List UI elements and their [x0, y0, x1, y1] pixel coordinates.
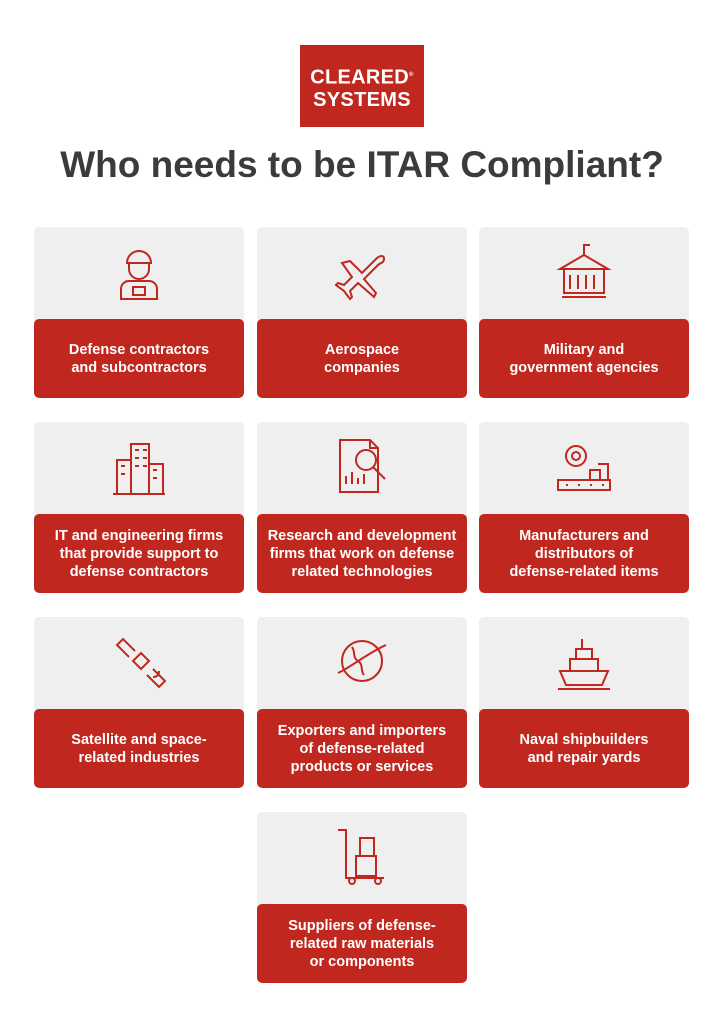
label	[479, 514, 689, 593]
label	[257, 709, 467, 788]
label	[257, 514, 467, 593]
logo: SYSTEMS	[313, 89, 411, 111]
label	[257, 904, 467, 983]
panel: naval	[479, 617, 689, 788]
label	[34, 514, 244, 593]
logo	[300, 45, 424, 127]
icon: buildings	[113, 443, 165, 495]
label	[257, 319, 467, 398]
label: and repair yards	[528, 750, 640, 766]
panel: military	[479, 227, 689, 398]
label: or components	[310, 954, 414, 970]
panel: R&D	[257, 422, 467, 593]
icon: government building	[556, 244, 612, 298]
label: related industries	[79, 750, 199, 766]
label: related technologies	[291, 564, 432, 580]
label: firms that work on defense	[270, 546, 454, 562]
label	[34, 319, 244, 398]
label	[34, 709, 244, 788]
panel: IT firms	[34, 422, 244, 593]
icon: document magnifier	[339, 439, 386, 493]
label: Aerospace	[325, 342, 399, 358]
label: Naval shipbuilders	[520, 732, 648, 748]
label: Research and development	[268, 528, 456, 544]
icon: ship	[558, 639, 610, 690]
icon: hand truck	[338, 829, 384, 885]
panel: exporters	[257, 617, 467, 788]
label	[479, 709, 689, 788]
label: products or services	[291, 758, 433, 774]
logo: CLEARED®	[310, 67, 414, 89]
label: companies	[324, 360, 400, 376]
label: defense contractors	[70, 564, 208, 580]
label	[479, 319, 689, 398]
label: IT and engineering firms	[55, 528, 223, 544]
label: and subcontractors	[71, 360, 207, 376]
panel: suppliers	[257, 812, 467, 983]
icon: satellite	[116, 638, 166, 688]
panel: satellite	[34, 617, 244, 788]
label: Satellite and space-	[71, 732, 207, 748]
label: distributors of	[535, 546, 633, 562]
label: that provide support to	[60, 546, 218, 562]
label: Manufacturers and	[519, 528, 649, 544]
label: Exporters and importers	[278, 722, 446, 738]
icon: gear conveyor	[557, 445, 611, 491]
label: government agencies	[509, 360, 659, 376]
panel: aerospace	[257, 227, 467, 398]
icon: globe	[338, 640, 386, 682]
label: related raw materials	[290, 936, 434, 952]
label: defense-related items	[509, 564, 659, 580]
icon: soldier	[120, 250, 158, 300]
title: Who needs to be ITAR Compliant?	[60, 144, 664, 185]
icon: plane	[334, 255, 385, 300]
label: of defense-related	[300, 740, 424, 756]
label: Defense contractors	[69, 342, 209, 358]
label: Military and	[544, 342, 624, 358]
label: Suppliers of defense-	[288, 918, 436, 934]
panel: defense contractors	[34, 227, 244, 398]
panel: manufacturers	[479, 422, 689, 593]
